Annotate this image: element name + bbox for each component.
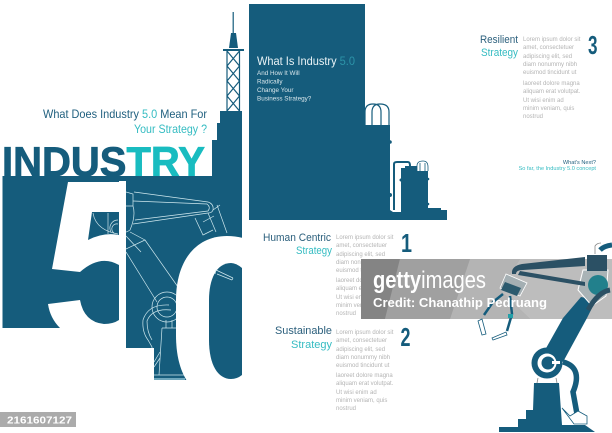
watermark band [361,259,612,319]
heading: human centric strategy [263,232,332,257]
text block: resilient lorem: aliquam erat volutpat. [523,89,581,95]
text block: sustainable lorem: amet, consectetuer [336,338,387,344]
text block: sustainable lorem: laoreet dolore magna [336,373,393,379]
text block: sustainable lorem: Ut wisi enim ad [336,390,377,396]
text block: human centric lorem: laoreet dolore magna [336,278,393,284]
heading: human centric strategy: Strategy [296,245,332,257]
panel: resilient strategy [480,30,598,120]
text block: human centric lorem: nostrud [336,311,356,317]
robot elbow joint [532,348,562,383]
panel: sustainable strategy [275,322,410,412]
heading: what does industry mean [43,107,207,136]
text block: sustainable lorem: minim veniam, quis [336,398,387,404]
silhouette: panel with factory tanks [249,4,447,220]
heading: human centric strategy: Human Centric [263,232,331,244]
heading: what is industry: What Is Industry 5.0 [257,54,355,68]
robot gripper [478,274,527,340]
heading: sustainable strategy [275,325,332,351]
number: 2: 2 [400,322,410,352]
text block: human centric lorem: amet, consectetuer [336,243,387,249]
robot hose [563,362,577,414]
text block: resilient lorem [523,37,581,120]
numeral: 5 [2,176,126,328]
text block: human centric lorem: Lorem ipsum dolor sit [336,235,394,241]
text block: what's next [519,160,596,172]
text block: sustainable lorem [336,330,394,412]
panel: what is industry 5.0 [249,4,447,220]
text block: resilient lorem: minim veniam, quis [523,106,574,112]
text block: subtitle: And How It Will [257,70,300,77]
text block: human centric lorem: euismod tincidunt ut [336,268,390,274]
number: 3: 3 [588,30,598,60]
text block: human centric lorem: Ut wisi enim ad [336,295,377,301]
text block: what's next: So far, the Industry 5.0 concept [519,166,596,172]
line art: robot arm [126,192,227,375]
robot forearm [512,257,585,286]
heading: sustainable strategy: Sustainable [275,325,332,337]
text block: sustainable lorem: adipiscing elit, sed [336,347,385,353]
robot base [499,383,595,432]
watermark text [373,267,547,310]
text block: resilient lorem: amet, consectetuer [523,45,574,51]
panel: industry 5.0 factory block [2,12,244,381]
text block: resilient lorem: adipiscing elit, sed [523,54,572,60]
text block: sustainable lorem: euismod tincidunt ut [336,363,390,369]
panel: human centric strategy [263,228,412,317]
watermark text: gettyimages [373,267,486,294]
text block: subtitle [257,70,312,102]
robot upper joint [578,243,612,310]
text block: human centric lorem: minim veniam, quis [336,303,387,309]
text block: sustainable lorem: diam nonummy nibh [336,355,390,361]
text block: resilient lorem: euismod tincidunt ut [523,70,577,76]
text block: human centric lorem [336,235,394,317]
icon: factory tower [212,12,244,176]
text block: human centric lorem: aliquam erat volutpat. [336,286,394,292]
text block: subtitle: Radically [257,78,283,86]
heading: resilient strategy [480,34,518,59]
watermark text: Credit: Chanathip Pedruang [373,296,547,310]
text block: sustainable lorem: Lorem ipsum dolor sit [336,330,394,336]
text block: resilient lorem: Lorem ipsum dolor sit [523,37,581,43]
stock id badge: 2161607127 [7,416,73,426]
text block: sustainable lorem: aliquam erat volutpat. [336,381,394,387]
numeral: 0 with robot arm line art [126,176,243,381]
heading: INDUSTRY wordmark: INDUSTRY [2,138,205,185]
text block: what's next: What's Next? [563,160,596,166]
text block: resilient lorem: diam nonummy nibh [523,62,577,68]
heading: what does industry mean: Your Strategy ? [134,122,207,136]
heading: what does industry mean: What Does Industry 5.0 Mean For [43,107,207,121]
text block: human centric lorem: diam nonummy nibh [336,260,390,266]
robot lower arm [545,297,596,362]
text block: resilient lorem: nostrud [523,114,543,120]
number: 1: 1 [401,228,412,258]
text block: sustainable lorem: nostrud [336,406,356,412]
illustration: robot arm [478,243,612,432]
heading: resilient strategy: Strategy [481,47,518,59]
text block: resilient lorem: Ut wisi enim ad [523,98,564,104]
text block: resilient lorem: laoreet dolore magna [523,81,580,87]
heading: resilient strategy: Resilient [480,34,518,46]
stock id badge [0,412,76,427]
heading: sustainable strategy: Strategy [291,339,332,351]
text block: subtitle: Business Strategy? [257,96,312,102]
text block: human centric lorem: adipiscing elit, sed [336,252,385,258]
text block: subtitle: Change Your [257,87,293,94]
